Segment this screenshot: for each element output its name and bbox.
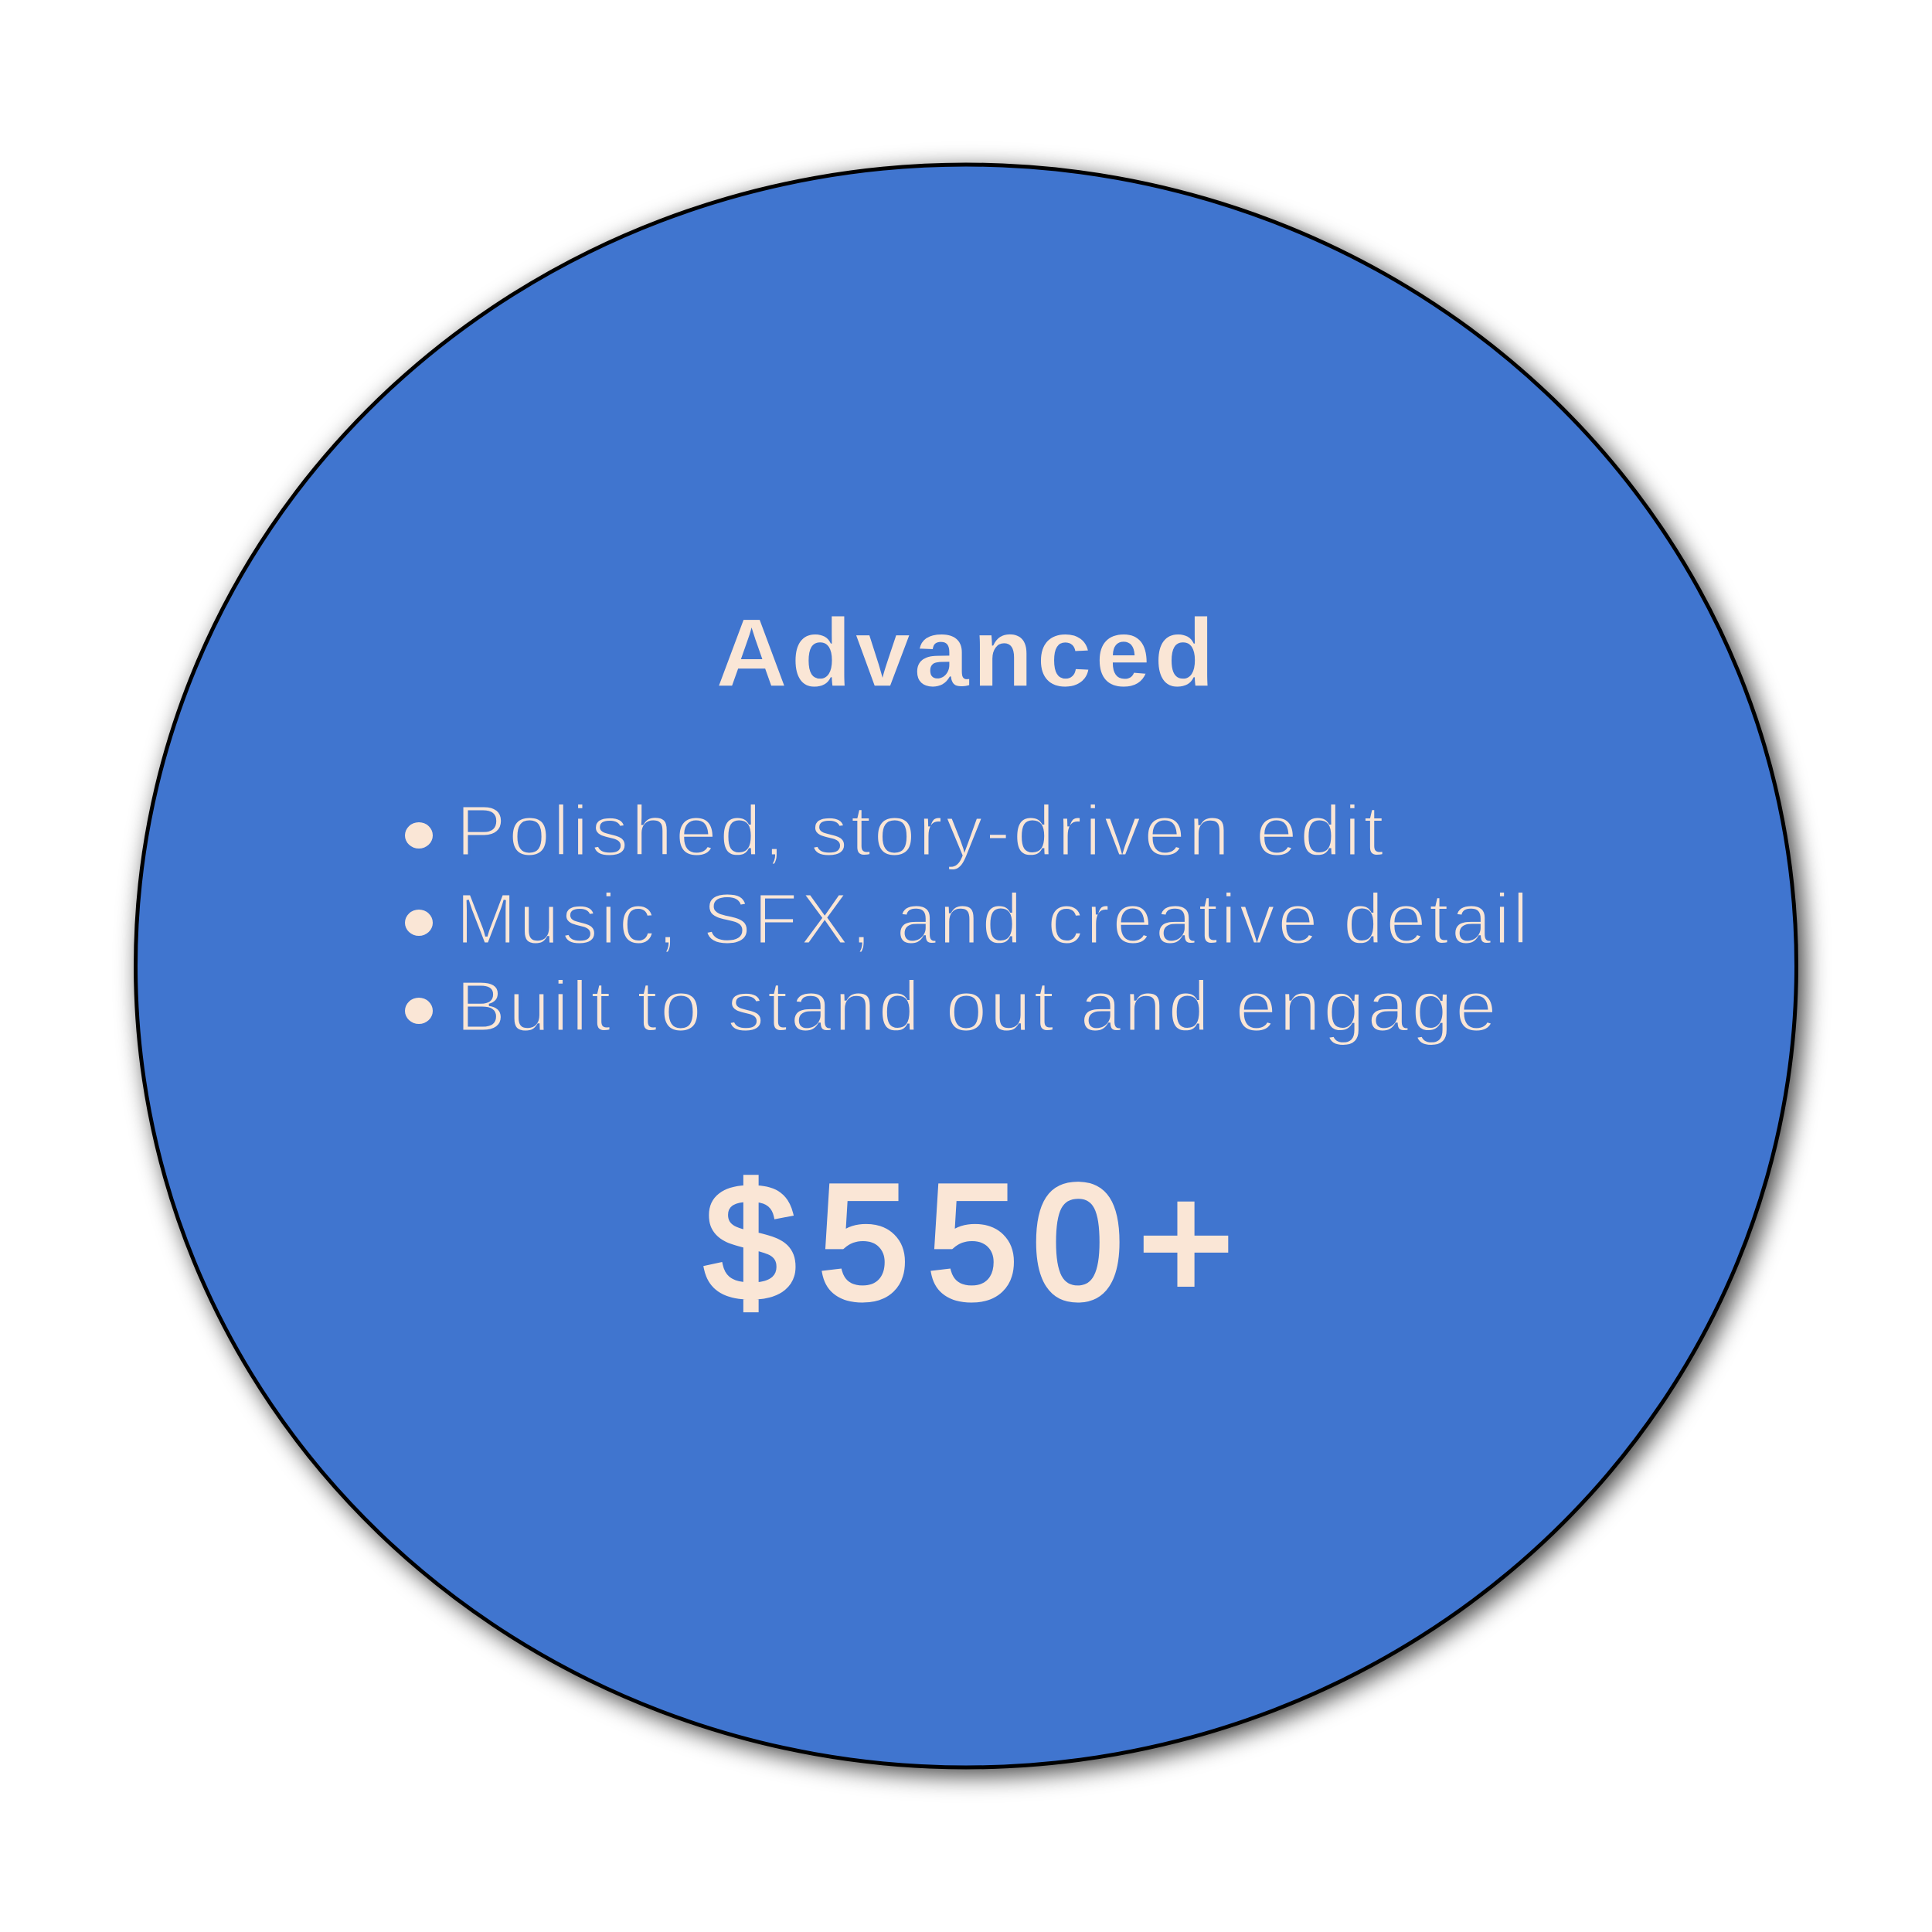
bullet item 3: Built to stand out and engage xyxy=(456,966,1499,1046)
heading: Advanced: Advanced xyxy=(716,598,1218,707)
feature list xyxy=(405,791,1531,1046)
price: $550+: $550+ xyxy=(705,1151,1233,1333)
bullet item 1: Polished, story-driven edit xyxy=(456,791,1386,871)
panel: blue ellipse with shadow xyxy=(136,165,1805,1776)
bullet item 2: Music, SFX, and creative detail xyxy=(456,879,1531,959)
